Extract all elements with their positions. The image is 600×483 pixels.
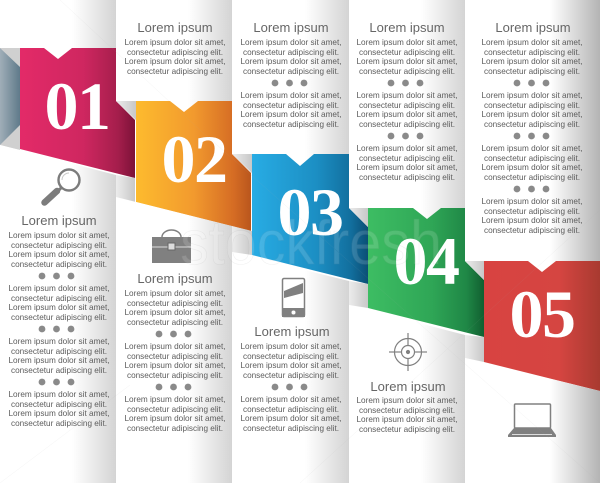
text block: column 3 top: Lorem ipsum dolor sit amet,: [240, 57, 342, 66]
text block: column 1 lower: consectetur adipiscing elit.: [11, 347, 107, 356]
panel: column 3 lower: [232, 252, 349, 483]
text block: column 2 top: [124, 20, 226, 76]
text block: column 3 lower: [240, 324, 342, 433]
text block: column 1 lower: Lorem ipsum dolor sit amet,: [8, 409, 110, 418]
text block: column 2 lower: consectetur adipiscing elit.: [127, 371, 223, 380]
text block: column 1 lower: [8, 213, 110, 428]
icon: smartphone: [282, 278, 305, 317]
text block: column 2 lower: Lorem ipsum dolor sit amet,: [124, 342, 226, 351]
text block: column 5 top: consectetur adipiscing elit.: [484, 101, 580, 110]
text block: column 3 lower: consectetur adipiscing elit.: [243, 352, 339, 361]
text block: column 2 lower: Lorem ipsum dolor sit amet,: [124, 289, 226, 298]
text block: column 3 lower: consectetur adipiscing elit.: [243, 424, 339, 433]
icon: briefcase: [152, 230, 191, 263]
text block: column 2 lower: Lorem ipsum dolor sit amet,: [124, 414, 226, 423]
text block: column 2 top: Lorem ipsum dolor sit amet,: [124, 38, 226, 47]
left slate ribbon: [0, 48, 20, 150]
text block: column 5 top: Lorem ipsum dolor sit amet,: [481, 110, 583, 119]
panel: column 5 lower: [465, 358, 600, 483]
text block: column 4 lower: Lorem ipsum dolor sit amet,: [356, 396, 458, 405]
flap: column 1 top: [0, 0, 116, 59]
text block: column 2 lower: consectetur adipiscing elit.: [127, 405, 223, 414]
text block: column 2 lower: Lorem ipsum dolor sit amet,: [124, 308, 226, 317]
panel: column 4 lower: [349, 305, 465, 483]
panel: column 1 lower: [0, 145, 116, 483]
text block: column 1 lower: consectetur adipiscing elit.: [11, 294, 107, 303]
text block: column 3 top: Lorem ipsum dolor sit amet,: [240, 38, 342, 47]
text block: column 1 lower: Lorem ipsum dolor sit amet,: [8, 303, 110, 312]
text block: column 1 lower: Lorem ipsum dolor sit amet,: [8, 231, 110, 240]
text block: column 2 lower: consectetur adipiscing elit.: [127, 318, 223, 327]
text block: column 2 top: consectetur adipiscing elit.: [127, 48, 223, 57]
number 03: 03: [278, 174, 342, 250]
text block: column 1 lower: Lorem ipsum dolor sit amet,: [8, 356, 110, 365]
banner: 05 red: [484, 261, 600, 391]
text block: column 5 top: Lorem ipsum dolor sit amet,: [481, 163, 583, 172]
text block: column 2 lower: consectetur adipiscing elit.: [127, 299, 223, 308]
text block: column 2 top: consectetur adipiscing elit.: [127, 67, 223, 76]
banner: 03 blue: [252, 154, 368, 308]
text block: column 4 top: consectetur adipiscing elit.: [359, 48, 455, 57]
text block: column 3 lower: Lorem ipsum dolor sit amet,: [240, 414, 342, 423]
text block: column 4 top: Lorem ipsum dolor sit amet,: [356, 38, 458, 47]
text block: column 4 top: consectetur adipiscing elit.: [359, 154, 455, 163]
text block: column 4 top: Lorem ipsum dolor sit amet,: [356, 163, 458, 172]
text block: column 5 top: Lorem ipsum dolor sit amet,: [481, 197, 583, 206]
text block: column 1 lower: consectetur adipiscing elit.: [11, 313, 107, 322]
text block: column 4 top: consectetur adipiscing elit.: [359, 101, 455, 110]
text block: column 3 top: Lorem ipsum dolor sit amet,: [240, 110, 342, 119]
text block: column 4 top: consectetur adipiscing elit.: [359, 173, 455, 182]
number 05: 05: [510, 276, 574, 352]
text block: column 1 lower: consectetur adipiscing elit.: [11, 260, 107, 269]
text block: column 4 top: Lorem ipsum dolor sit amet,: [356, 144, 458, 153]
text block: column 4 top: consectetur adipiscing elit.: [359, 120, 455, 129]
text block: column 4 lower: Lorem ipsum dolor sit amet,: [356, 415, 458, 424]
text block: column 3 lower: Lorem ipsum: [254, 324, 330, 339]
text block: column 4 top: consectetur adipiscing elit.: [359, 67, 455, 76]
text block: column 5 top: consectetur adipiscing elit.: [484, 173, 580, 182]
text block: column 5 top: consectetur adipiscing elit.: [484, 207, 580, 216]
text block: column 2 top: Lorem ipsum: [137, 20, 213, 35]
text block: column 1 lower: Lorem ipsum: [21, 213, 97, 228]
text block: column 5 top: consectetur adipiscing elit.: [484, 154, 580, 163]
text block: column 3 top: [240, 20, 342, 129]
flap: column 5 top: [465, 0, 600, 272]
text block: column 4 lower: consectetur adipiscing elit.: [359, 406, 455, 415]
text block: column 5 top: [481, 20, 583, 235]
text block: column 3 top: consectetur adipiscing elit.: [243, 67, 339, 76]
banner: 01 pink: [20, 48, 136, 202]
text block: column 5 top: consectetur adipiscing elit.: [484, 226, 580, 235]
text block: column 5 top: Lorem ipsum dolor sit amet,: [481, 144, 583, 153]
text block: column 4 top: Lorem ipsum dolor sit amet,: [356, 110, 458, 119]
flap: column 2 top: [116, 0, 232, 112]
text block: column 4 lower: consectetur adipiscing elit.: [359, 425, 455, 434]
text block: column 5 top: Lorem ipsum dolor sit amet,: [481, 216, 583, 225]
text block: column 3 lower: consectetur adipiscing elit.: [243, 371, 339, 380]
text block: column 2 lower: Lorem ipsum: [137, 271, 213, 286]
text block: column 1 lower: Lorem ipsum dolor sit amet,: [8, 337, 110, 346]
number 01: 01: [44, 68, 110, 144]
watermark: stockfresh: [180, 209, 442, 278]
text block: column 5 top: consectetur adipiscing elit.: [484, 120, 580, 129]
text block: column 5 top: consectetur adipiscing elit.: [484, 48, 580, 57]
text block: column 5 top: Lorem ipsum dolor sit amet,: [481, 38, 583, 47]
text block: column 4 lower: [356, 379, 458, 434]
text block: column 3 lower: Lorem ipsum dolor sit amet,: [240, 395, 342, 404]
text block: column 1 lower: consectetur adipiscing elit.: [11, 366, 107, 375]
number 02: 02: [162, 121, 226, 197]
text block: column 4 top: [356, 20, 458, 182]
text block: column 1 lower: Lorem ipsum dolor sit amet,: [8, 284, 110, 293]
text block: column 4 top: Lorem ipsum dolor sit amet,: [356, 91, 458, 100]
text block: column 2 lower: consectetur adipiscing elit.: [127, 352, 223, 361]
text block: column 4 top: Lorem ipsum dolor sit amet,: [356, 57, 458, 66]
icon: laptop: [508, 404, 556, 437]
text block: column 5 top: consectetur adipiscing elit.: [484, 67, 580, 76]
text block: column 2 lower: Lorem ipsum dolor sit amet,: [124, 361, 226, 370]
text block: column 1 lower: consectetur adipiscing elit.: [11, 241, 107, 250]
text block: column 1 lower: Lorem ipsum dolor sit amet,: [8, 390, 110, 399]
text block: column 1 lower: consectetur adipiscing elit.: [11, 400, 107, 409]
panel: column 2 lower: [116, 197, 232, 483]
text block: column 3 top: consectetur adipiscing elit.: [243, 48, 339, 57]
text block: column 3 lower: Lorem ipsum dolor sit amet,: [240, 361, 342, 370]
text block: column 5 top: Lorem ipsum: [495, 20, 571, 35]
flap: column 3 top: [232, 0, 349, 166]
text block: column 4 top: Lorem ipsum: [369, 20, 445, 35]
text block: column 3 lower: consectetur adipiscing elit.: [243, 405, 339, 414]
text block: column 5 top: Lorem ipsum dolor sit amet,: [481, 91, 583, 100]
text block: column 3 top: consectetur adipiscing elit.: [243, 120, 339, 129]
banner: 04 green: [368, 208, 484, 362]
text block: column 3 top: Lorem ipsum: [253, 20, 329, 35]
text block: column 3 top: Lorem ipsum dolor sit amet,: [240, 91, 342, 100]
number 04: 04: [394, 223, 459, 299]
text block: column 1 lower: consectetur adipiscing elit.: [11, 419, 107, 428]
banner: 02 orange: [136, 101, 252, 255]
text block: column 2 lower: [124, 271, 226, 433]
text block: column 4 lower: Lorem ipsum: [370, 379, 446, 394]
text block: column 2 top: Lorem ipsum dolor sit amet,: [124, 57, 226, 66]
flap: column 4 top: [349, 0, 465, 219]
icon: target: [389, 333, 427, 371]
icon: magnifier: [44, 170, 80, 202]
text block: column 3 top: consectetur adipiscing elit.: [243, 101, 339, 110]
text block: column 2 lower: consectetur adipiscing elit.: [127, 424, 223, 433]
text block: column 3 lower: Lorem ipsum dolor sit amet,: [240, 342, 342, 351]
text block: column 1 lower: Lorem ipsum dolor sit amet,: [8, 250, 110, 259]
text block: column 2 lower: Lorem ipsum dolor sit amet,: [124, 395, 226, 404]
text block: column 5 top: Lorem ipsum dolor sit amet,: [481, 57, 583, 66]
